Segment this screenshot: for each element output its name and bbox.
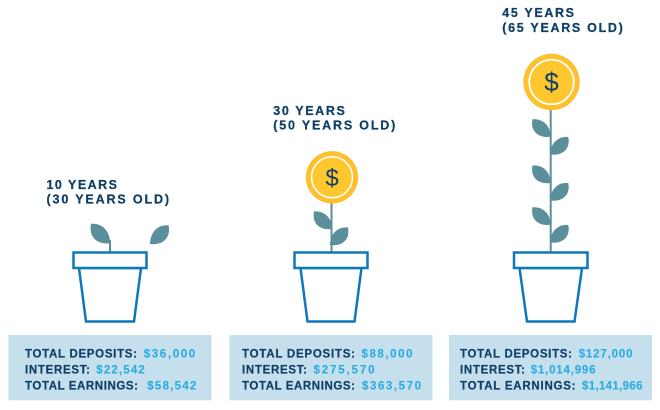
icon: coin: $ [544,67,559,97]
panel: 30 years totals: $275,570 [314,364,374,376]
panel: 10 years totals: $22,542 [96,364,145,376]
panel: 45 years totals: INTEREST: [460,364,525,376]
plant: tall with coin [523,54,580,252]
panel: 10 years totals: TOTAL DEPOSITS: [25,348,137,360]
panel: 10 years totals: TOTAL EARNINGS: [25,380,138,392]
panel: 10 years totals: INTEREST: [25,364,90,376]
panel: 45 years totals: TOTAL EARNINGS: [460,380,576,392]
panel: 30 years totals: $363,570 [362,380,421,392]
heading: 45 years [502,6,623,35]
heading: 30 years: (50 YEARS OLD) [273,119,395,133]
heading: 45 years: (65 YEARS OLD) [502,21,623,35]
panel: 45 years totals: $127,000 [579,348,632,360]
icon: coin: $ [325,165,339,192]
heading: 30 years [273,104,395,133]
panel: 10 years totals [8,335,212,400]
heading: 10 years: (30 YEARS OLD) [46,192,169,206]
panel: 30 years totals: TOTAL DEPOSITS: [242,348,355,360]
heading: 45 years: 45 YEARS [502,6,574,20]
panel: 30 years totals [230,335,432,400]
panel: 30 years totals: $88,000 [362,348,412,360]
icon: coin [523,54,580,110]
panel: 30 years totals: TOTAL EARNINGS: [242,380,355,392]
heading: 10 years: 10 YEARS [46,178,117,192]
pot: 30 years [294,252,368,322]
panel: 45 years totals [449,335,652,400]
panel: 10 years totals: $58,542 [147,380,196,392]
pot: 45 years [514,252,588,322]
plant: sprout [91,224,169,252]
panel: 45 years totals: TOTAL DEPOSITS: [460,348,572,360]
heading: 10 years [46,178,169,206]
pot: 10 years [74,252,146,322]
panel: 45 years totals: $1,141,966 [582,380,642,392]
plant: two leaves with coin [306,151,358,252]
panel: 30 years totals: INTEREST: [242,364,307,376]
panel: 45 years totals: $1,014,996 [531,364,596,376]
panel: 10 years totals: $36,000 [144,348,195,360]
heading: 30 years: 30 YEARS [273,104,345,118]
